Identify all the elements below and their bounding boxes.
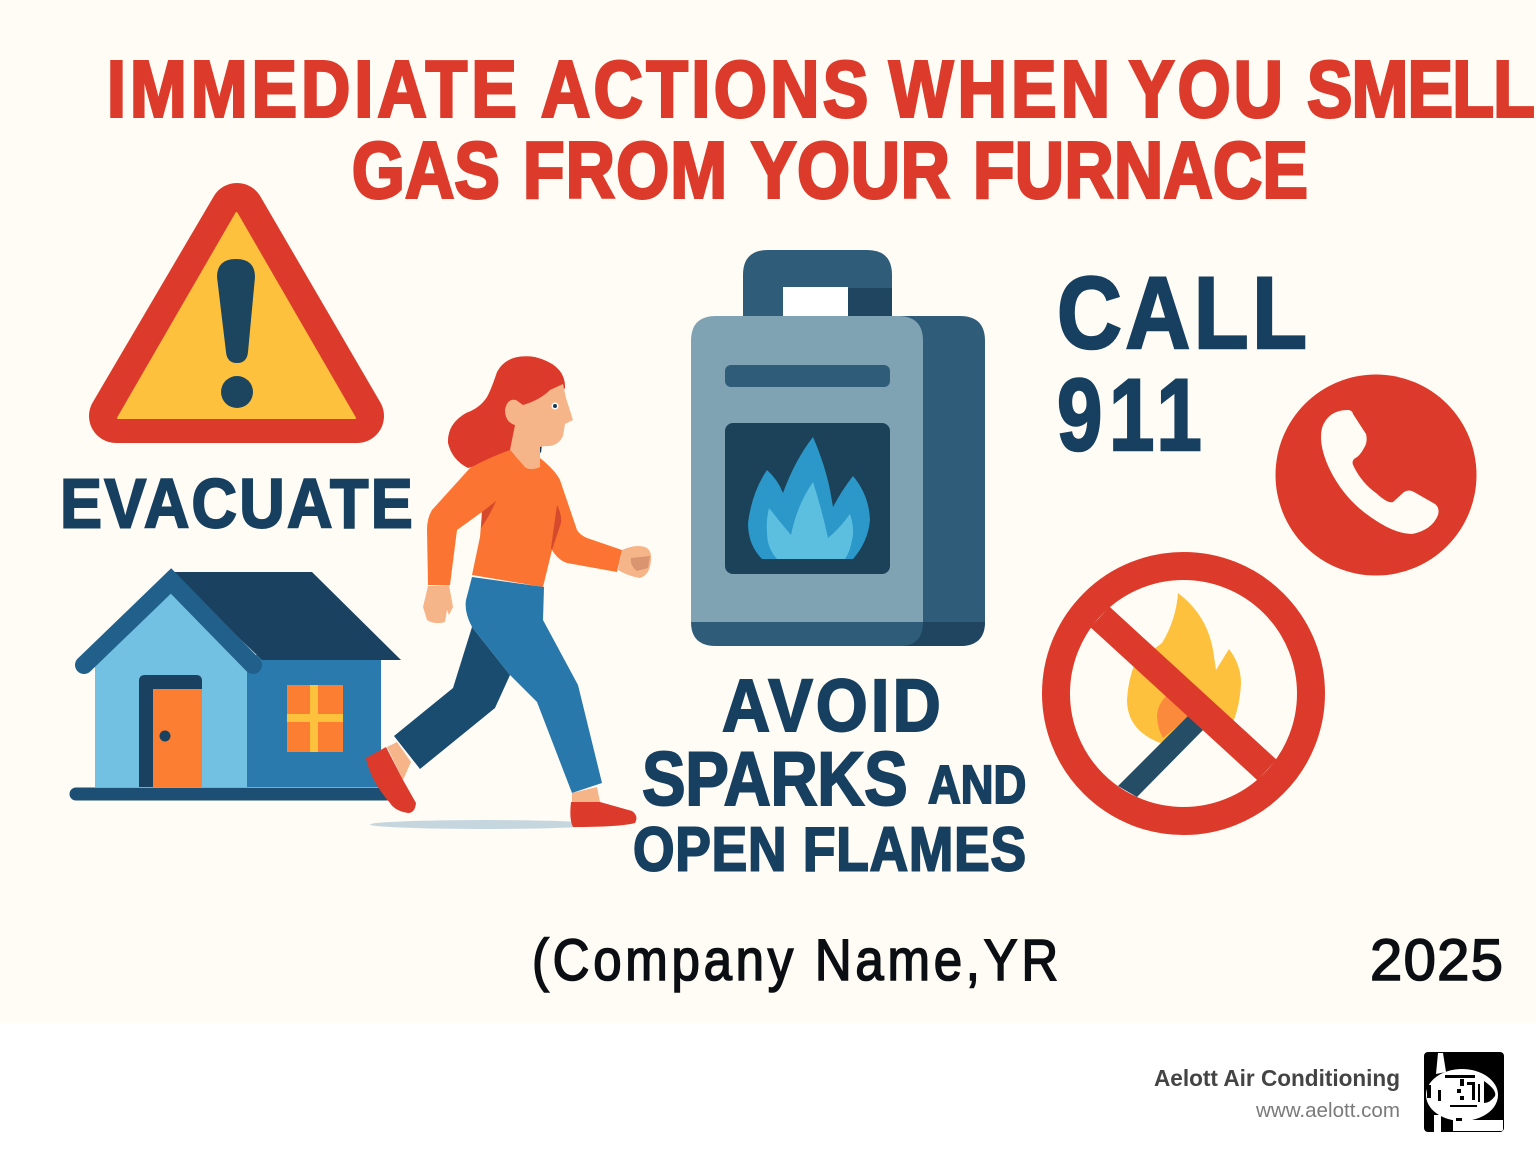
icon: running woman	[366, 356, 651, 829]
title: YOU	[1129, 44, 1283, 134]
heading: avoid sparks and open flames	[633, 664, 1026, 884]
title: YOUR	[751, 125, 950, 215]
heading: avoid sparks and open flames: SPARKS	[642, 737, 908, 822]
title: SMELL	[1307, 44, 1535, 134]
title: WHEN	[889, 44, 1110, 134]
heading: call 911: CALL	[1057, 257, 1307, 370]
heading: call 911	[1057, 257, 1307, 472]
title: FURNACE	[973, 125, 1308, 215]
icon: furnace	[691, 250, 985, 646]
source line: 2025	[1370, 928, 1503, 993]
footer brand name: Aelott Air Conditioning	[1154, 1065, 1400, 1091]
icon: no open flames	[1056, 566, 1311, 821]
heading: call 911: 911	[1057, 357, 1202, 472]
title: FROM	[523, 125, 727, 215]
source line: (Company Name,YR	[532, 928, 1058, 993]
icon: house	[76, 572, 401, 794]
heading: avoid sparks and open flames: AND	[928, 754, 1026, 815]
icon: warning triangle	[116, 210, 357, 418]
title: GAS	[352, 125, 500, 215]
footer logo	[1424, 1052, 1504, 1132]
heading: avoid sparks and open flames: AVOID	[722, 664, 941, 747]
footer website: www.aelott.com	[1255, 1100, 1400, 1122]
title: ACTIONS	[541, 44, 868, 134]
heading: avoid sparks and open flames: OPEN FLAMES	[633, 816, 1026, 884]
icon: phone	[1276, 374, 1476, 576]
title	[107, 44, 1535, 215]
heading: evacuate: EVACUATE	[60, 465, 413, 543]
title: IMMEDIATE	[107, 44, 517, 134]
source line	[532, 928, 1503, 993]
